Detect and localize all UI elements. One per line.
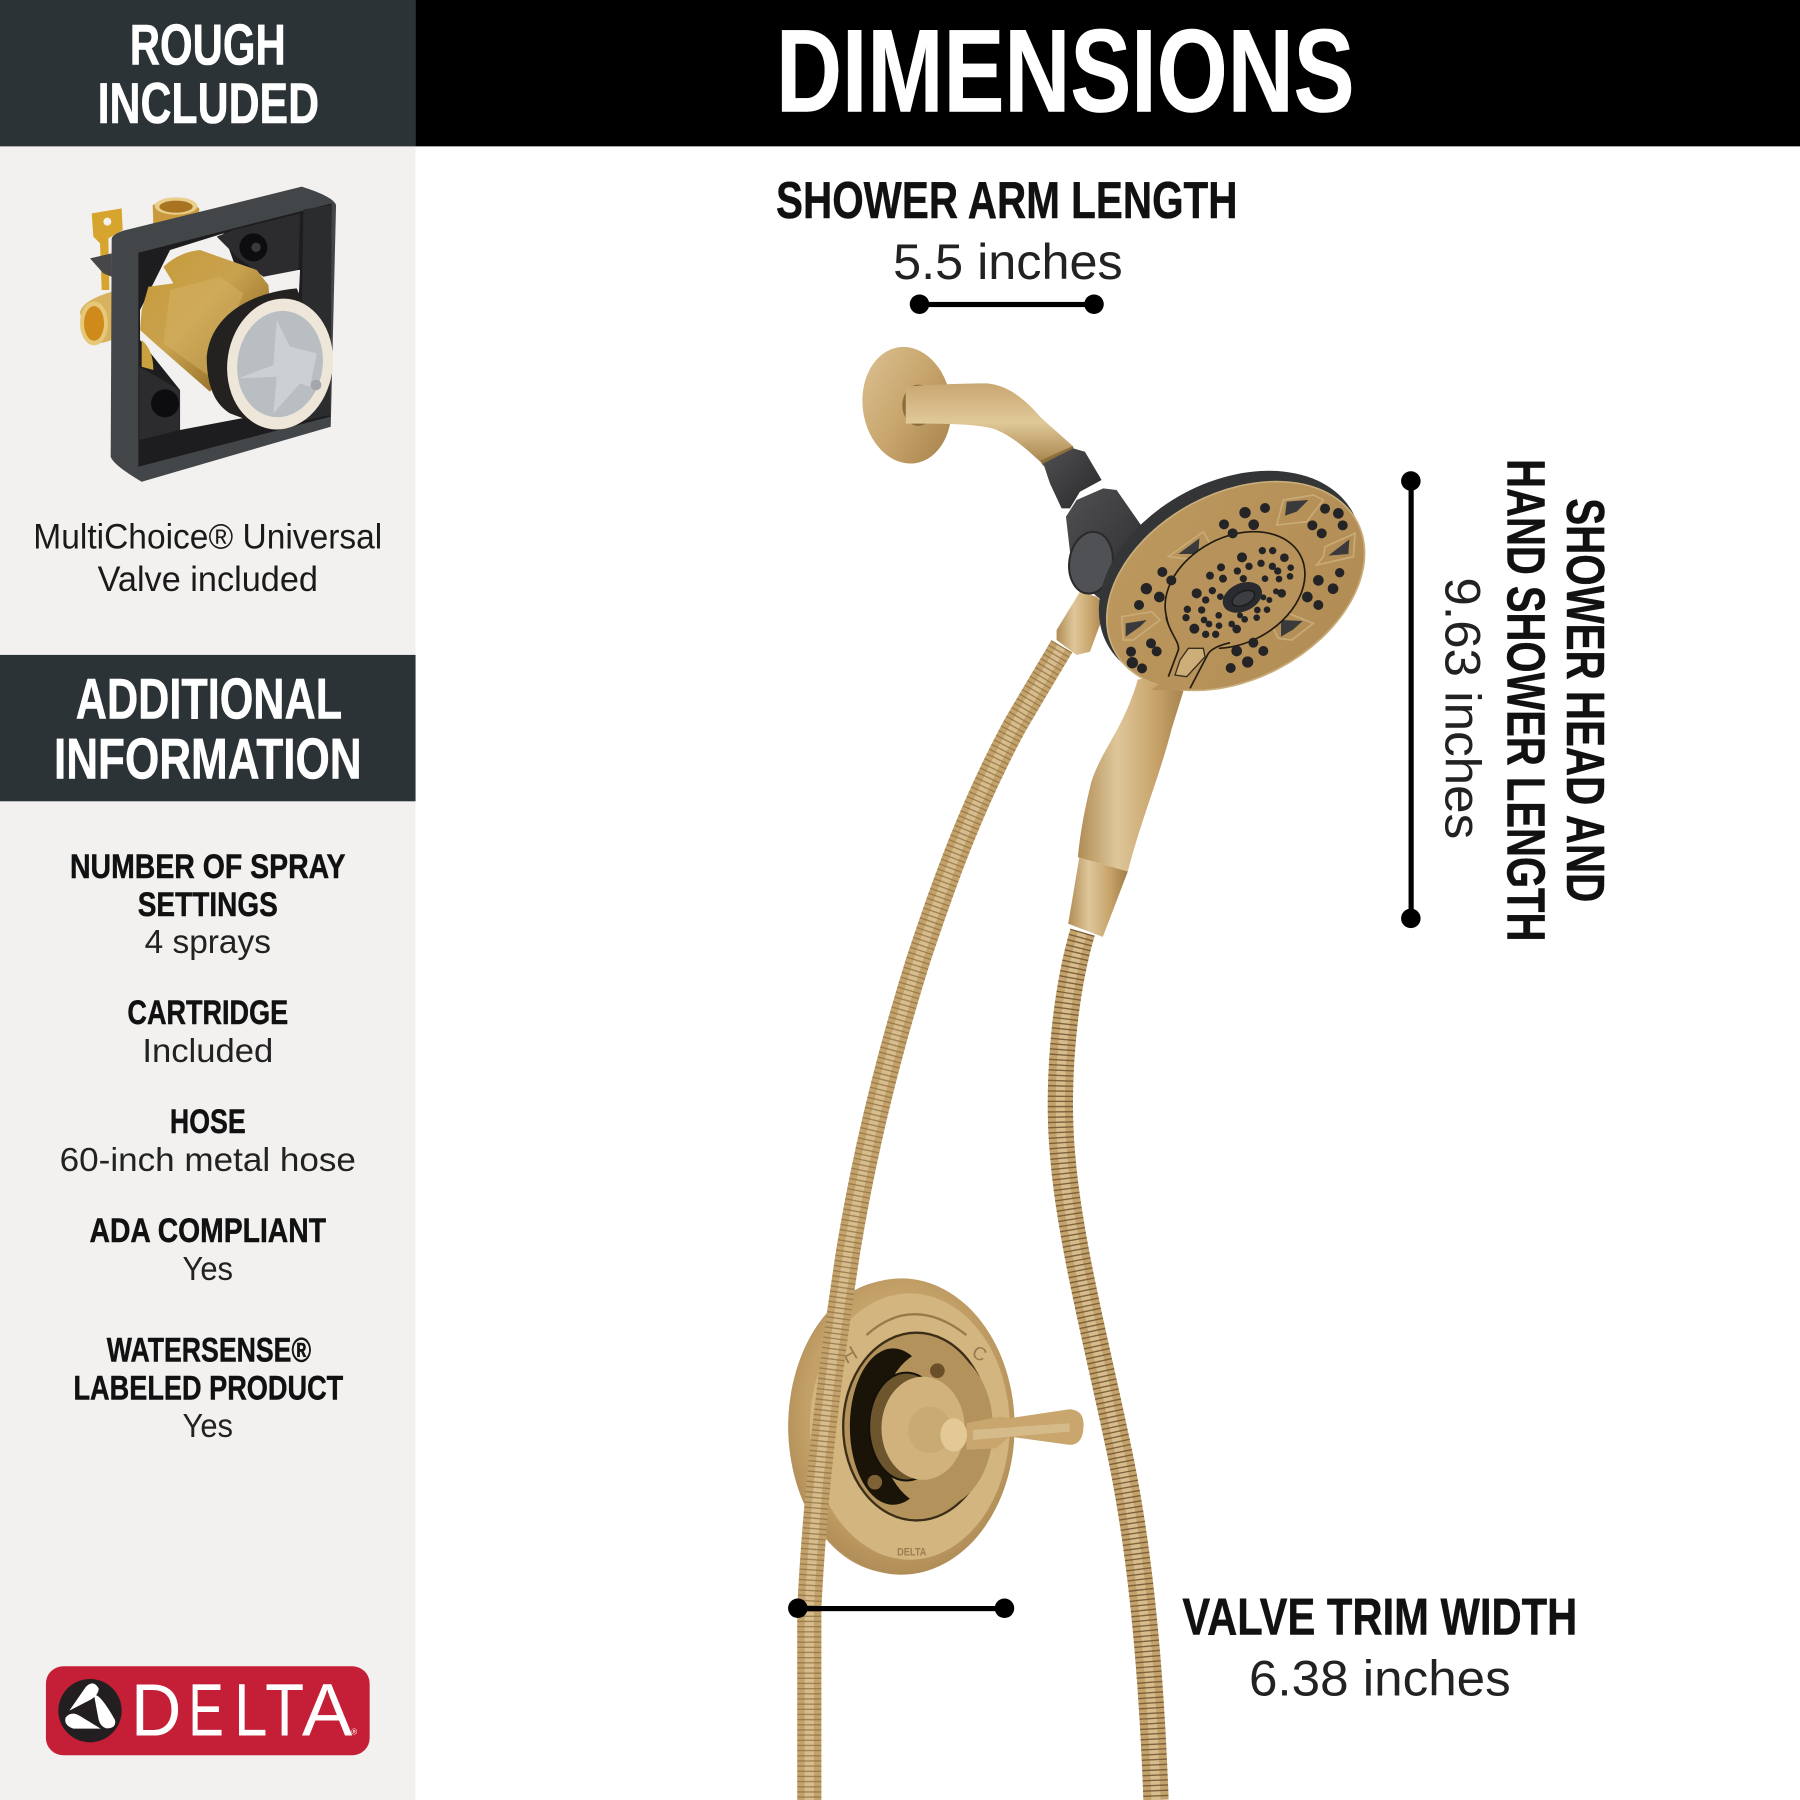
spec: cartridge: CARTRIDGE — [127, 994, 288, 1032]
spec: ada compliant: ADA COMPLIANT — [90, 1212, 326, 1250]
spec: ada compliant — [90, 1212, 326, 1288]
spec: cartridge: Included — [142, 1033, 273, 1070]
spec: ada compliant: Yes — [183, 1251, 233, 1288]
logo wordmark: T — [265, 1668, 304, 1752]
callout: shower head and hand shower length: SHOWER HEAD AND — [1555, 498, 1615, 902]
hose connector — [1057, 592, 1107, 655]
logo wordmark: ® — [351, 1728, 357, 1737]
ball mount — [1066, 488, 1157, 602]
heading: additional information: INFORMATION — [54, 727, 362, 791]
dimension line: valve trim width — [788, 1599, 1014, 1618]
text: valve caption: MultiChoice® Universal — [33, 517, 382, 557]
flexible hose: left — [809, 646, 1062, 1800]
text: valve caption — [33, 517, 382, 599]
icon: rough-in valve — [80, 187, 341, 482]
spec: watersense labeled product — [73, 1331, 343, 1445]
valve trim plate: DELTA — [897, 1547, 926, 1559]
inner lobe — [1145, 508, 1325, 672]
spec: hose — [60, 1103, 356, 1179]
callout: shower head and hand shower length: 9.63 inches — [1434, 577, 1491, 839]
logo wordmark — [131, 1668, 357, 1752]
spec: watersense labeled product: Yes — [183, 1408, 233, 1445]
valve trim plate: C — [969, 1341, 990, 1366]
head face — [1071, 439, 1401, 733]
heading: additional information — [0, 655, 416, 801]
title bar: dimensions — [416, 0, 1800, 146]
dimension line: shower arm — [910, 294, 1104, 314]
logo wordmark: D — [131, 1668, 181, 1752]
panel: sidebar — [0, 0, 416, 1800]
callout: valve trim width — [1182, 1588, 1577, 1707]
callout: valve trim width: 6.38 inches — [1249, 1650, 1511, 1707]
heading: additional information: ADDITIONAL — [76, 668, 342, 732]
thread collar — [1040, 446, 1075, 466]
callout: valve trim width: VALVE TRIM WIDTH — [1182, 1588, 1577, 1646]
head back — [1062, 428, 1398, 729]
flexible hose: right — [1060, 932, 1156, 1800]
logo wordmark: A — [302, 1668, 353, 1752]
hand shower neck — [1068, 858, 1128, 937]
logo: delta — [46, 1666, 370, 1755]
heading: rough included: INCLUDED — [98, 72, 319, 136]
hand shower body — [1078, 671, 1190, 871]
logo wordmark: E — [188, 1668, 224, 1752]
shower arm — [906, 383, 1073, 461]
callout: shower head and hand shower length: HAND SHOWER LENGTH — [1495, 459, 1555, 941]
shower arm upper mount — [1040, 446, 1157, 655]
logo wordmark: L — [234, 1668, 267, 1752]
lobe tail outline — [1166, 617, 1230, 688]
valve trim plate — [788, 1278, 1084, 1575]
text: valve caption: Valve included — [98, 559, 318, 599]
callout: shower head and hand shower length — [1434, 459, 1615, 941]
spec: number of spray settings — [70, 848, 346, 961]
spec: hose: 60-inch metal hose — [60, 1142, 356, 1179]
spec: cartridge — [127, 994, 288, 1070]
spray trigger — [1175, 648, 1205, 677]
valve trim plate: H — [838, 1342, 862, 1369]
swivel nut — [1043, 448, 1102, 508]
mount cap — [1065, 529, 1117, 596]
spec: watersense labeled product: LABELED PRODUCT — [73, 1369, 343, 1407]
spray hub — [1218, 576, 1267, 619]
spec: watersense labeled product: WATERSENSE® — [107, 1331, 311, 1369]
dimension line: shower head length — [1401, 471, 1421, 928]
callout: shower arm length: SHOWER ARM LENGTH — [776, 171, 1237, 229]
shower head — [1062, 428, 1401, 733]
wedges — [1126, 500, 1349, 637]
nozzles — [1126, 503, 1348, 673]
shower flange — [855, 341, 959, 469]
spec: hose: HOSE — [170, 1103, 246, 1141]
lobe tail — [1152, 617, 1233, 690]
title bar: dimensions: DIMENSIONS — [776, 5, 1355, 137]
hand shower — [1068, 671, 1190, 937]
callout: shower arm length — [776, 171, 1238, 290]
spec: number of spray settings: NUMBER OF SPRAY — [70, 848, 346, 886]
callout: shower arm length: 5.5 inches — [893, 233, 1123, 290]
logo mark — [58, 1679, 122, 1742]
heading: rough included — [0, 0, 416, 146]
wedge frames — [1122, 495, 1355, 640]
spec: number of spray settings: SETTINGS — [138, 886, 278, 924]
spec: number of spray settings: 4 sprays — [145, 924, 271, 961]
heading: rough included: ROUGH — [130, 13, 286, 77]
